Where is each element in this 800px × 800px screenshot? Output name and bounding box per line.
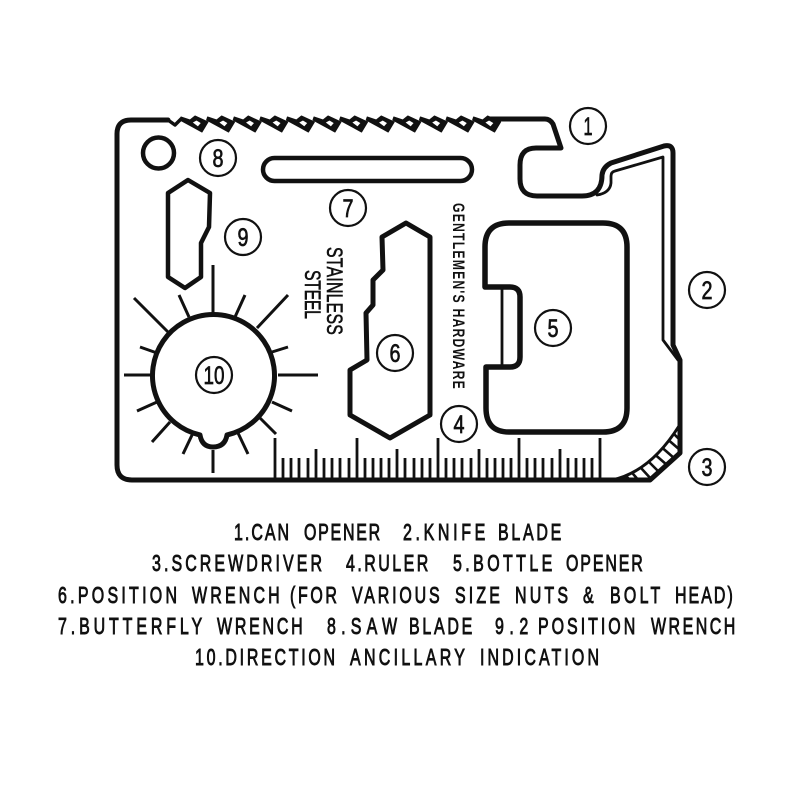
caption: line 3: VARIOUS — [352, 583, 440, 609]
caption: line 4: WRENCH — [217, 614, 303, 640]
bottle opener inner line — [501, 287, 503, 367]
number 10 — [196, 357, 232, 393]
caption: line 1: 1.CAN — [234, 520, 289, 546]
number 6 — [377, 335, 413, 371]
caption: line 4: BLADE — [409, 614, 472, 640]
number 4 — [441, 406, 477, 442]
caption: line 3 — [58, 583, 733, 609]
multi-tool card — [117, 116, 682, 482]
saw blade teeth — [168, 116, 501, 132]
card outline and can opener — [117, 119, 680, 480]
brand text: GENTLEMEN'S HARDWARE — [448, 203, 467, 389]
bottle opener cutout — [485, 223, 627, 432]
caption: line 5 — [195, 645, 599, 671]
number 6: 6 — [390, 340, 400, 368]
caption: line 5: INDICATION — [480, 645, 599, 671]
butterfly wrench slot — [263, 158, 472, 181]
number 5: 5 — [548, 315, 558, 343]
number 9 — [225, 219, 261, 255]
position wrench cutout — [350, 223, 430, 438]
caption: line 4: POSITION — [538, 614, 635, 640]
caption: line 3: WRENCH — [192, 583, 280, 609]
caption: line 4: WRENCH — [651, 614, 735, 640]
number 5 — [535, 310, 571, 346]
compass circle — [152, 315, 274, 447]
caption: line 5: 10.DIRECTION — [195, 645, 335, 671]
caption: line 1: OPENER — [304, 520, 380, 546]
number 7: 7 — [342, 195, 354, 223]
caption: line 2 — [152, 551, 643, 577]
caption: line 4 — [58, 614, 735, 640]
stainless steel text: STEEL — [299, 270, 323, 319]
caption: line 1: 2.KNIFE — [403, 520, 485, 546]
number 2 — [689, 272, 725, 308]
caption: line 3: SIZE — [455, 583, 500, 609]
caption: line 3: BOLT — [610, 583, 660, 609]
number 1 — [570, 108, 606, 144]
caption: line 1 — [234, 520, 561, 546]
number 10: 10 — [204, 362, 224, 390]
number 1: 1 — [584, 113, 592, 141]
caption: line 3: & — [583, 583, 594, 609]
screwdriver edge — [616, 426, 678, 478]
caption: line 2: 4.RULER — [346, 551, 428, 577]
number 7 — [330, 190, 366, 226]
caption: line 3: NUTS — [515, 583, 568, 609]
caption: line 4: 7.BUTTERFLY — [58, 614, 202, 640]
caption: line 2: OPENER — [566, 551, 643, 577]
number 4: 4 — [454, 411, 465, 439]
caption: line 2: 5.BOTTLE — [453, 551, 552, 577]
number 8: 8 — [212, 145, 224, 173]
caption: line 5: ANCILLARY — [350, 645, 465, 671]
knife blade inner line — [597, 157, 678, 360]
key ring hole — [143, 138, 174, 168]
caption: line 3: (FOR — [290, 583, 337, 609]
stainless steel text — [299, 247, 345, 335]
number 3: 3 — [702, 454, 712, 482]
compass spikes — [124, 265, 318, 473]
number 8 — [200, 140, 236, 176]
stainless steel text: STAINLESS — [321, 247, 345, 335]
caption: line 4: 8.SAW — [327, 614, 397, 640]
2 position wrench cutout — [168, 180, 210, 288]
caption: line 3: HEAD) — [675, 583, 733, 609]
caption: line 2: 3.SCREWDRIVER — [152, 551, 322, 577]
caption: line 4: 9.2 — [495, 614, 528, 640]
number 2: 2 — [702, 277, 712, 305]
caption: line 3: 6.POSITION — [58, 583, 177, 609]
caption: line 1: BLADE — [498, 520, 561, 546]
number 9: 9 — [238, 224, 248, 252]
number 3 — [689, 449, 725, 485]
ruler ticks — [275, 438, 600, 480]
